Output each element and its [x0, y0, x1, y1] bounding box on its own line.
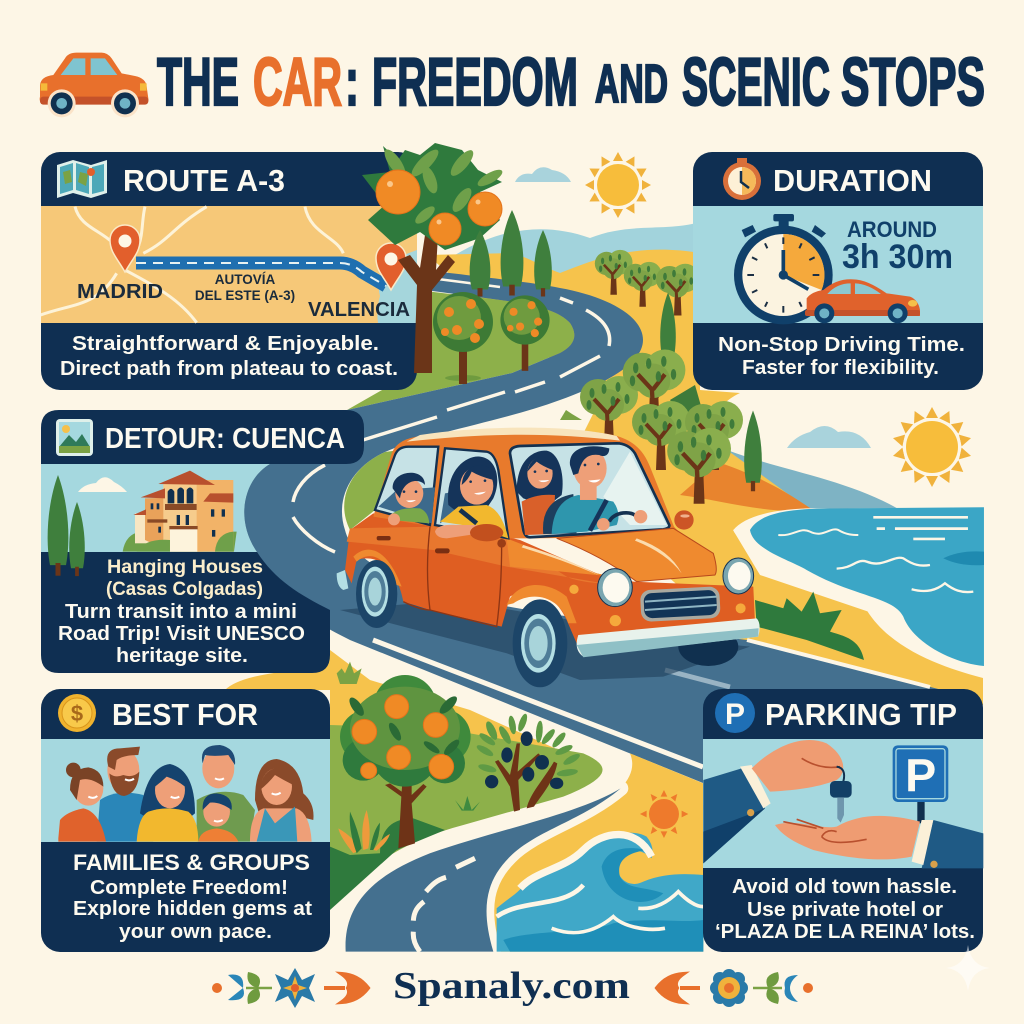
family group [58, 745, 314, 842]
route map [41, 206, 417, 323]
road markings [293, 278, 930, 767]
green patch behind car [344, 450, 393, 530]
yellow land [427, 250, 983, 705]
panel: route A-3 [41, 152, 417, 390]
olive grove [560, 250, 762, 504]
agave plant bottom [338, 810, 390, 853]
boy [198, 793, 238, 842]
icon: parking circle: P [725, 698, 745, 731]
girl left [58, 763, 106, 842]
key handover illustration: P [905, 750, 936, 802]
man back [197, 745, 255, 842]
title: THE [157, 44, 239, 120]
title: : [345, 44, 359, 120]
duration value: 3h 30m [842, 238, 953, 276]
icon: landscape picture [56, 419, 93, 456]
doors and handles [403, 527, 502, 627]
heading: detour: DETOUR: CUENCA [105, 423, 345, 455]
grille [640, 586, 721, 622]
caption: best for [73, 850, 312, 943]
caption: parking: ‘PLAZA DE LA REINA’ lots. [715, 921, 975, 943]
caption: detour: (Casas Colgadas) [106, 579, 263, 600]
caption: best for: FAMILIES & GROUPS [73, 850, 310, 875]
stopwatch and car [734, 214, 920, 324]
woman centre [137, 764, 198, 842]
panel: best for [41, 689, 330, 952]
caption: duration: Faster for flexibility. [742, 357, 939, 379]
route map: DEL ESTE (A-3) [195, 288, 295, 303]
far blue hills [456, 224, 693, 273]
route map: AUTOVÍA [215, 272, 275, 287]
duration value: AROUND [847, 217, 937, 242]
title: FREEDOM [372, 44, 578, 120]
dad [97, 747, 153, 842]
caption: detour [58, 557, 305, 667]
winding road [243, 270, 950, 800]
bumpers [337, 570, 348, 590]
footer ornament right [657, 969, 813, 1007]
caption: detour: Turn transit into a mini [65, 601, 297, 623]
wheels [356, 560, 397, 628]
duration value [842, 217, 953, 276]
orange tree over route panel [362, 143, 505, 373]
caption: duration [718, 334, 965, 379]
faint sparkle mark [946, 945, 990, 991]
heading: route: ROUTE A-3 [123, 163, 285, 198]
indicators [569, 585, 579, 594]
route map: MADRID [77, 281, 163, 303]
caption: best for: Explore hidden gems at [73, 898, 312, 920]
title [157, 44, 985, 120]
Cuenca scene [41, 464, 281, 576]
caption: detour: Hanging Houses [107, 557, 263, 578]
windows [375, 447, 438, 525]
footer ornament left [212, 968, 368, 1008]
far wheel [678, 627, 738, 666]
panel: duration [693, 152, 983, 390]
caption: detour: heritage site. [116, 645, 248, 667]
title: CAR [253, 44, 342, 120]
heading: best for: BEST FOR [112, 697, 258, 732]
headlights [598, 569, 632, 607]
panel: detour Cuenca [41, 410, 364, 673]
orange headland and blue hill [680, 450, 900, 512]
icon: dollar coin [58, 694, 96, 732]
cypress and orange trees on hill [433, 210, 552, 384]
sun top [585, 152, 651, 218]
website name: Spanaly.com [393, 965, 630, 1007]
sun right [892, 407, 972, 487]
woman right [250, 759, 314, 842]
lower left yellow strip [226, 650, 603, 770]
cloud right [787, 426, 871, 448]
title: AND [595, 54, 668, 114]
icon: parking circle [715, 693, 755, 733]
hood [557, 528, 716, 582]
cloud top [515, 167, 571, 182]
heading: parking: PARKING TIP [765, 697, 957, 732]
title car icon [40, 53, 148, 117]
caption: duration: Non-Stop Driving Time. [718, 334, 965, 356]
heading: duration: DURATION [773, 163, 932, 198]
caption: parking [715, 876, 975, 943]
caption: route: Straightforward & Enjoyable. [72, 333, 379, 355]
green inner hill [347, 290, 574, 410]
route map: VALENCIA [308, 299, 410, 321]
passengers [388, 446, 647, 538]
road shadow [340, 600, 750, 680]
lower vignette: garden, road and wave [330, 662, 703, 952]
orange tree bottom [340, 675, 471, 848]
body [345, 513, 755, 643]
key handover illustration [703, 740, 983, 868]
caption: best for: your own pace. [119, 921, 272, 943]
icon: clock [723, 158, 761, 200]
hero car with family [337, 428, 760, 687]
caption: route [60, 333, 398, 380]
caption: parking: Use private hotel or [747, 899, 943, 921]
caption: route: Direct path from plateau to coast. [60, 358, 398, 380]
caption: detour: Road Trip! Visit UNESCO [58, 623, 305, 645]
right coast scene [733, 507, 984, 678]
caption: parking: Avoid old town hassle. [732, 876, 957, 898]
smiles [88, 778, 281, 822]
olive tree bottom [475, 713, 581, 812]
mirrors [470, 524, 503, 541]
central scenic landscape [225, 152, 984, 952]
icon: dollar coin: $ [71, 701, 83, 726]
title: SCENIC [682, 44, 830, 120]
icon: folded map [57, 160, 107, 198]
caption: best for: Complete Freedom! [90, 877, 288, 899]
panel: parking tip [703, 689, 983, 952]
